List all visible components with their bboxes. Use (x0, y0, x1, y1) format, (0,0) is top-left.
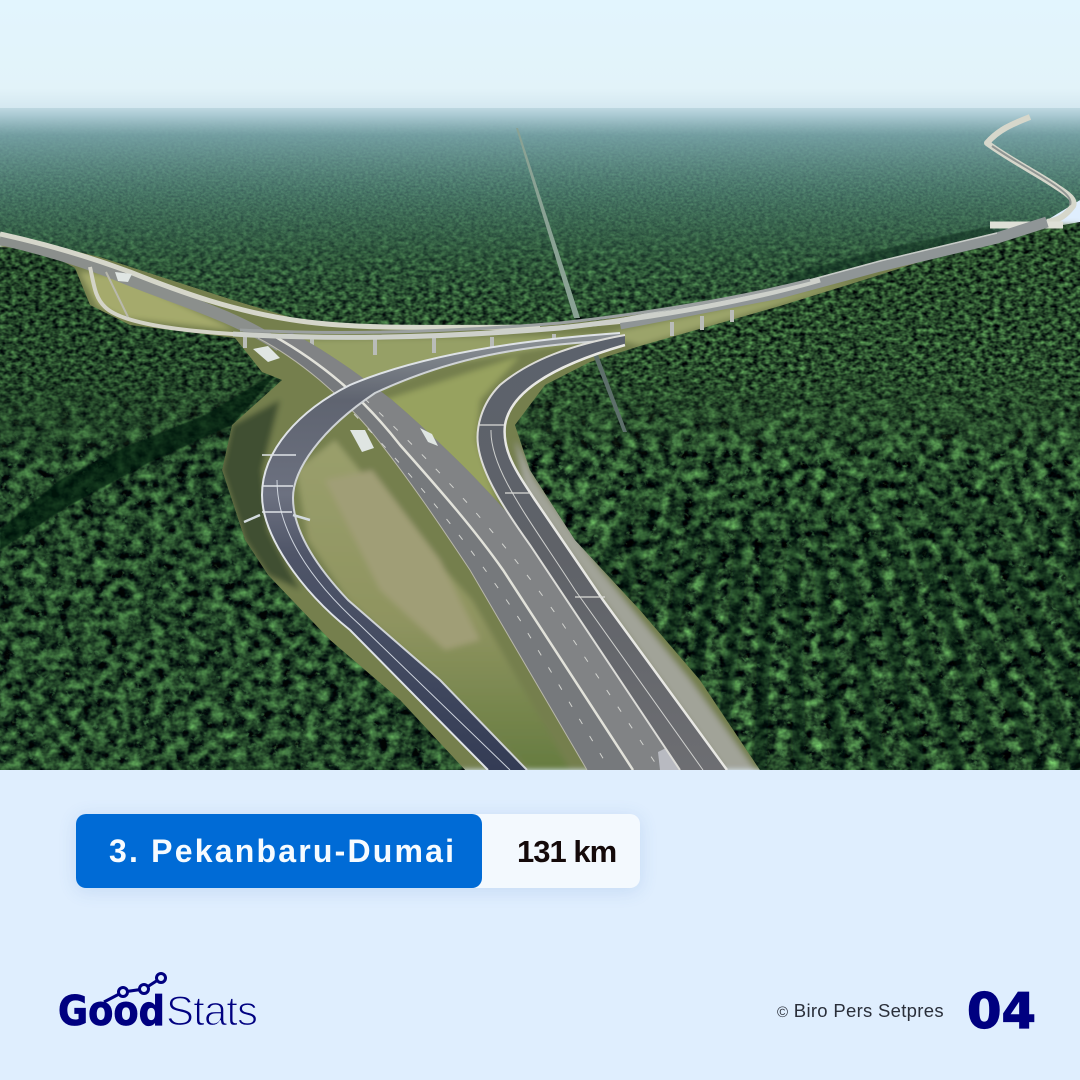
road: main highway carriageways (258, 333, 685, 770)
road: distant highway heading to horizon (620, 117, 1074, 324)
logo wordmark (58, 987, 258, 1035)
road: west main lanes (0, 234, 620, 346)
road: elevated east-west bridge (233, 280, 820, 337)
ground: interchange grass and soil (0, 225, 1080, 770)
sky (0, 0, 1080, 108)
forest: dark planting rows (600, 465, 1080, 770)
page number: 04 (967, 983, 1036, 1040)
logo wordmark: Stats (166, 987, 258, 1034)
photo: aerial view of toll road interchange through palm plantation (0, 95, 1080, 770)
length value card: 131 km (517, 834, 616, 869)
label pill: route name and length (71, 812, 645, 896)
credit: © Biro Pers Setpres (777, 1000, 944, 1021)
road: overpass piers (243, 310, 734, 355)
structures: small white roadside pads (115, 272, 438, 452)
logo chart line icon (104, 974, 166, 1002)
forest: right plantation (515, 222, 1080, 770)
road: right curving ramp (478, 335, 727, 770)
route name card: 3. Pekanbaru-Dumai (109, 833, 456, 869)
route name card (76, 814, 482, 888)
forest: upper plantation with haze (0, 100, 1080, 335)
cleared strip through plantation (516, 128, 627, 432)
length value card (76, 814, 640, 888)
logo: GoodStats (58, 972, 258, 1035)
road: left looping ramp (244, 333, 620, 770)
logo wordmark: Good (58, 987, 165, 1035)
forest: left plantation (0, 240, 500, 770)
